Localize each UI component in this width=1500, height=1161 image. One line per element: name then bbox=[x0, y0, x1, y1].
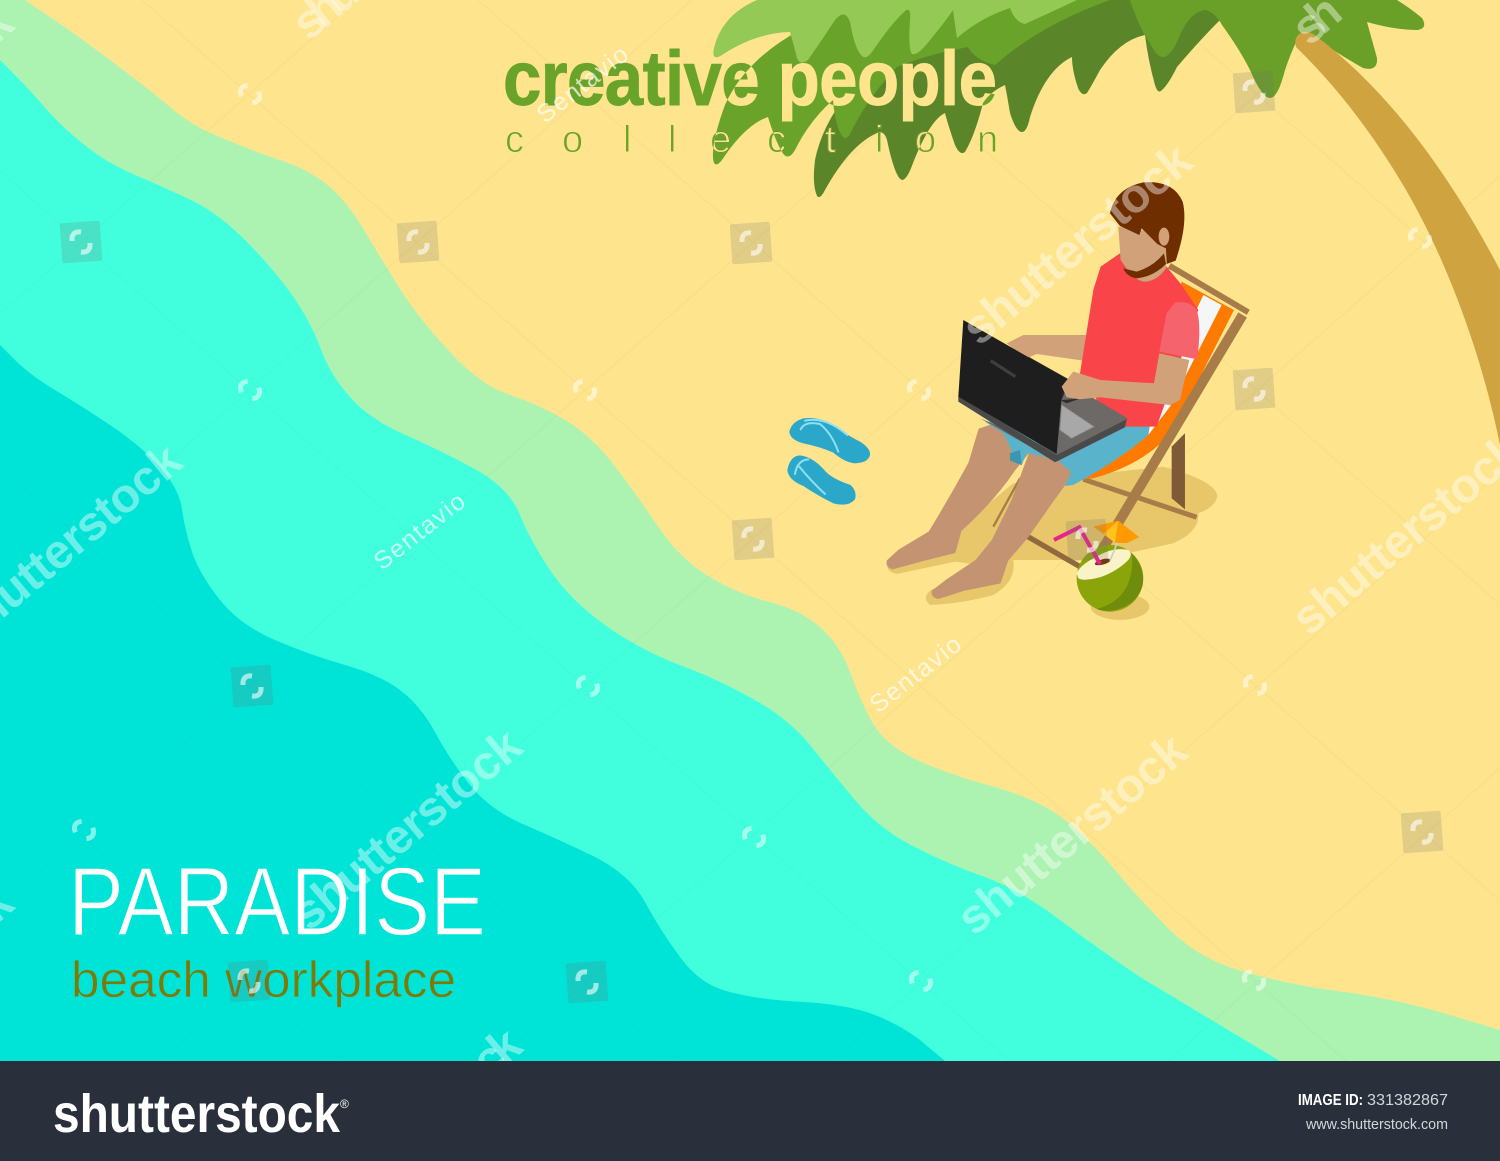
sleeve bbox=[1159, 302, 1199, 359]
trunk bbox=[1295, 32, 1500, 445]
upper flip flop bbox=[789, 418, 870, 463]
upper strap bbox=[801, 420, 847, 452]
lower flip flop bbox=[787, 455, 856, 505]
chair thin leg bbox=[993, 478, 1020, 527]
stock watermarks: Sentavio bbox=[864, 630, 967, 719]
coconut hole bbox=[1094, 557, 1111, 567]
title part over palm in sand colour bbox=[713, 48, 996, 153]
shorts bbox=[985, 422, 1150, 486]
front leg of man bbox=[933, 455, 1069, 597]
chair cross bar bbox=[1083, 479, 1197, 517]
footer logo: shutterstock bbox=[53, 1084, 341, 1144]
registered mark: ® bbox=[340, 1097, 349, 1111]
umbrella stick bbox=[1110, 543, 1117, 561]
ground shadow bbox=[887, 467, 1217, 605]
umbrella yellow panel bbox=[1103, 521, 1118, 543]
shorts shadow fold bbox=[1010, 450, 1022, 465]
image id number: 331382867 bbox=[1367, 1092, 1448, 1109]
palm tree bbox=[713, 0, 1500, 445]
image id label: IMAGE ID: bbox=[1298, 1092, 1363, 1109]
flip flops bbox=[787, 418, 870, 505]
near arm bbox=[1062, 353, 1189, 405]
stock watermarks: shutterstock bbox=[947, 723, 1197, 945]
coconut bbox=[1077, 545, 1143, 612]
chair fabric orange bbox=[1077, 282, 1234, 480]
coconut dark side bbox=[1097, 553, 1143, 611]
right fronds bbox=[1130, 0, 1424, 98]
title: creative people collection bbox=[505, 48, 996, 153]
subtitle green: collection bbox=[505, 119, 998, 161]
chair long frame bbox=[1100, 315, 1243, 553]
stock watermarks: shutterstock bbox=[282, 718, 532, 940]
stock watermarks: Sentavio bbox=[531, 40, 634, 129]
neck and face bbox=[1118, 227, 1167, 282]
torso red t-shirt bbox=[1080, 253, 1198, 427]
chair fabric white stripe bbox=[1148, 295, 1222, 435]
umbrella bbox=[1093, 521, 1139, 543]
stock watermarks: ck bbox=[462, 1017, 532, 1088]
website: www.shutterstock.com bbox=[1305, 1116, 1448, 1133]
stock watermarks: Sentavio bbox=[368, 487, 471, 576]
deep water bbox=[0, 345, 945, 1061]
turquoise water bbox=[0, 60, 1280, 1061]
chair front bar bbox=[1027, 536, 1080, 567]
heading: PARADISE: PARADISE bbox=[68, 847, 486, 956]
footer bar bbox=[0, 1061, 1500, 1161]
lower strap bbox=[795, 459, 825, 494]
subheading: beach workplace: beach workplace bbox=[71, 951, 456, 1008]
dark fronds bbox=[814, 0, 1220, 197]
stock watermarks: shutterstock bbox=[952, 133, 1202, 355]
man on deck chair with laptop bbox=[887, 182, 1248, 620]
near hand over laptop bbox=[1062, 372, 1100, 399]
straw bbox=[1054, 527, 1100, 564]
hair bbox=[1110, 182, 1184, 264]
title part over palm in sand colour: collection bbox=[505, 119, 998, 161]
far arm bbox=[1007, 335, 1087, 361]
title part over palm in sand colour: creative people bbox=[503, 35, 997, 122]
coconut shadow bbox=[1091, 593, 1149, 620]
title line green: creative people bbox=[503, 35, 997, 122]
laptop keyboard bbox=[1060, 405, 1094, 438]
ear bbox=[1159, 228, 1169, 246]
laptop lid bbox=[958, 320, 1068, 454]
beard bbox=[1123, 253, 1166, 278]
chair rear leg bbox=[1172, 433, 1185, 509]
chair top bar bbox=[1169, 266, 1248, 312]
medium fronds bbox=[713, 0, 1110, 165]
laptop bottom edge bbox=[958, 396, 1127, 462]
rear leg of man bbox=[888, 425, 1027, 568]
laptop lid slot bbox=[991, 361, 1015, 377]
light frond bbox=[713, 0, 1077, 63]
coconut flesh bbox=[1077, 549, 1131, 580]
laptop hinge bbox=[1028, 357, 1080, 403]
laptop base bbox=[980, 358, 1127, 462]
